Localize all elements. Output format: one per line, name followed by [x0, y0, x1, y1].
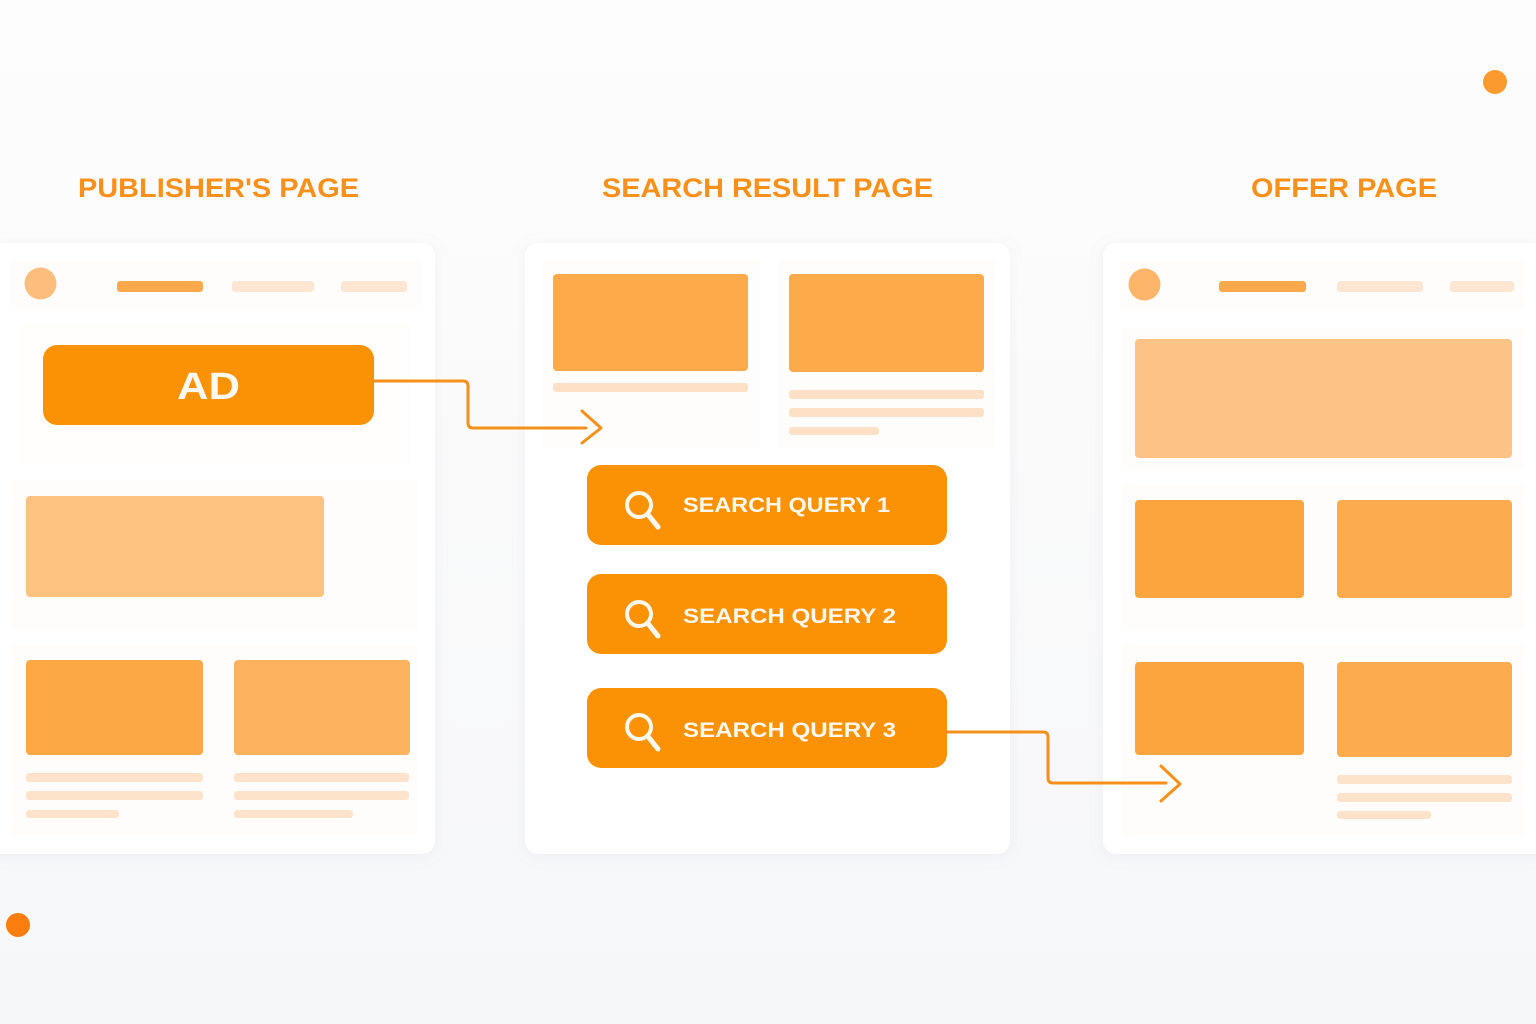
panel: offer page	[1103, 243, 1536, 854]
search query 3 button	[587, 688, 947, 768]
icon: magnifier	[627, 602, 658, 636]
search query 2 button: SEARCH QUERY 2	[683, 605, 896, 628]
nav bar	[10, 261, 422, 310]
heading: search result page: SEARCH RESULT PAGE	[602, 173, 933, 203]
banner section	[12, 480, 418, 630]
heading: publisher's page: PUBLISHER'S PAGE	[78, 173, 359, 203]
ad section background	[18, 325, 412, 465]
product row 2	[1122, 645, 1525, 835]
nav bar	[1120, 261, 1525, 310]
icon: magnifier	[627, 715, 658, 749]
heading: offer page: OFFER PAGE	[1251, 173, 1437, 203]
article cards	[12, 645, 418, 835]
search query 1 button	[587, 465, 947, 545]
product row 1	[1122, 485, 1525, 630]
result tile 1	[543, 260, 760, 450]
panel: search result page	[525, 243, 1010, 854]
ad button	[43, 345, 374, 425]
decorative dot: bottom left	[6, 913, 30, 937]
ad button: AD	[177, 366, 240, 408]
search query 1 button: SEARCH QUERY 1	[683, 494, 890, 517]
decorative dot: top right	[1483, 70, 1507, 94]
result tile 2	[778, 260, 995, 450]
search query 2 button	[587, 574, 947, 654]
search query 3 button: SEARCH QUERY 3	[683, 719, 896, 742]
arrow: search query 3 to offer page	[947, 732, 1180, 801]
panel: publisher's page	[0, 243, 435, 854]
hero section	[1122, 328, 1525, 470]
arrow: ad to search result page	[374, 381, 601, 443]
icon: magnifier	[627, 493, 658, 527]
